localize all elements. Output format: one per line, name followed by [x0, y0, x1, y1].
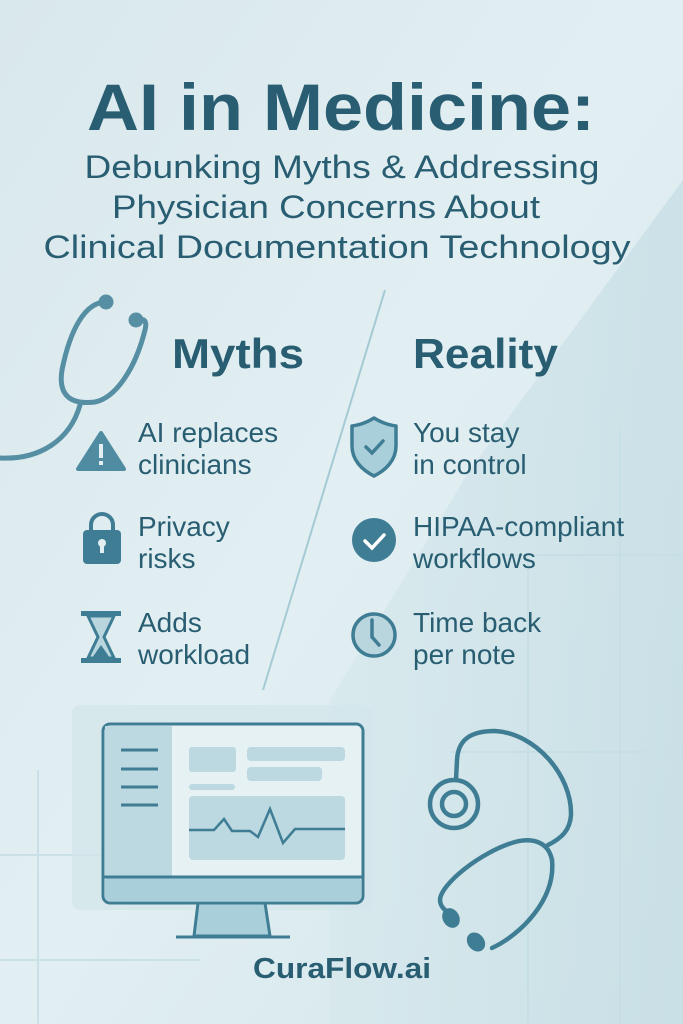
myth 3: [81, 607, 250, 670]
subtitle: Debunking Myths & Addressing: [84, 149, 600, 185]
myth 1: [78, 417, 278, 480]
myth 3: workload: [137, 639, 250, 670]
reality 2: workflows: [412, 543, 536, 574]
myth 2: risks: [138, 543, 196, 574]
brand: CuraFlow.ai: [253, 953, 431, 985]
subtitle: [44, 149, 630, 265]
myth 1: clinicians: [138, 449, 252, 480]
heading: Myths: Myths: [172, 330, 304, 377]
reality 3: Time back: [413, 607, 542, 638]
monitor illustration: [72, 705, 372, 937]
heading: Reality: Reality: [413, 330, 559, 377]
myth 2: [83, 511, 230, 574]
subtitle: Clinical Documentation Technology: [44, 229, 630, 265]
reality 3: [353, 607, 542, 670]
title: AI in Medicine:: [87, 70, 595, 144]
reality 2: [352, 511, 624, 574]
reality 1: You stay: [413, 417, 519, 448]
icon: stethoscope top-left: [0, 297, 146, 458]
reality 3: per note: [413, 639, 516, 670]
reality 1: in control: [413, 449, 527, 480]
reality 1: [352, 417, 527, 480]
subtitle: Physician Concerns About: [112, 189, 540, 225]
myth 3: Adds: [138, 607, 202, 638]
reality 2: HIPAA-compliant: [413, 511, 624, 542]
myth 2: Privacy: [138, 511, 230, 542]
icon: stethoscope bottom-right: [430, 731, 571, 952]
myth 1: AI replaces: [138, 417, 278, 448]
